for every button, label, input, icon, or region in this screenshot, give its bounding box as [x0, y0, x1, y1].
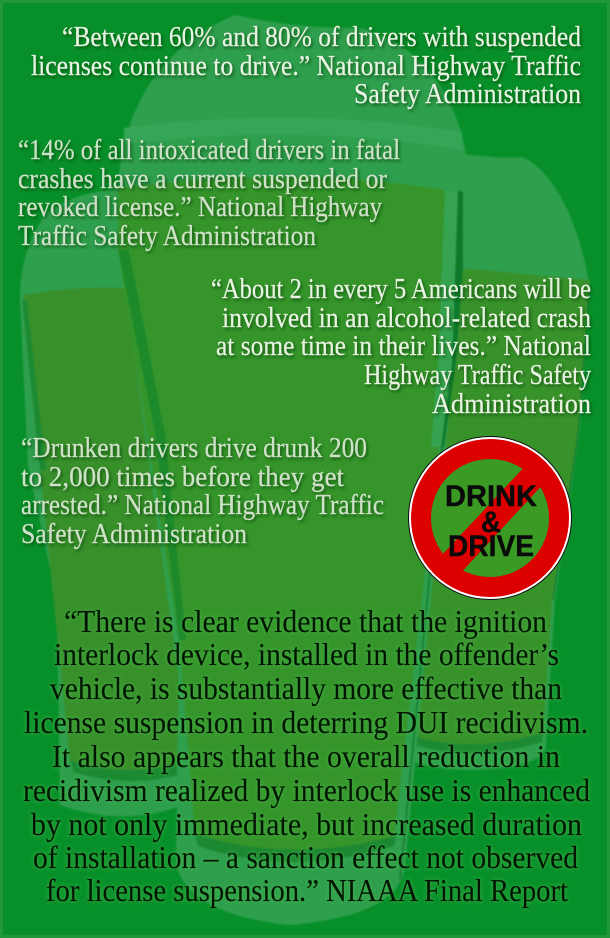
closing quote: NIAAA report: It also appears that the overall reduction in [52, 738, 560, 774]
quote 3 [211, 274, 591, 420]
quote 2 [18, 135, 400, 252]
quote 4 [21, 433, 384, 550]
quote 1: Safety Administration [354, 79, 581, 110]
icon: no drink and drive sign: & [481, 506, 501, 539]
quote 1 [31, 22, 581, 110]
closing quote: NIAAA report [23, 603, 590, 908]
icon: no drink and drive sign: DRIVE [448, 530, 534, 563]
closing quote: NIAAA report: interlock device, installed in the offender’s [54, 636, 559, 672]
quote 4: to 2,000 times before they get [21, 462, 344, 493]
left glass [20, 187, 195, 816]
quote 3: Administration [432, 389, 591, 420]
quote 2: revoked license.” National Highway [18, 192, 382, 223]
quote 2: crashes have a current suspended or [18, 164, 388, 195]
icon: no drink and drive sign [408, 436, 572, 600]
quote 4: Safety Administration [21, 519, 247, 550]
closing quote: NIAAA report: vehicle, is substantially more effective than [50, 670, 562, 706]
quote 2: Traffic Safety Administration [18, 221, 316, 252]
center glass [118, 15, 466, 925]
closing quote: NIAAA report: “There is clear evidence that the ignition [64, 603, 547, 639]
quote 2: “14% of all intoxicated drivers in fatal [18, 135, 400, 166]
icon: no drink and drive sign: DRINK [445, 480, 537, 513]
right glass [380, 154, 590, 770]
quote 4: arrested.” National Highway Traffic [21, 490, 384, 521]
closing quote: NIAAA report: by not only immediate, but increased duration [31, 806, 582, 842]
quote 4: “Drunken drivers drive drunk 200 [21, 433, 367, 464]
closing quote: NIAAA report: of installation – a sanction effect not observed [33, 839, 578, 875]
